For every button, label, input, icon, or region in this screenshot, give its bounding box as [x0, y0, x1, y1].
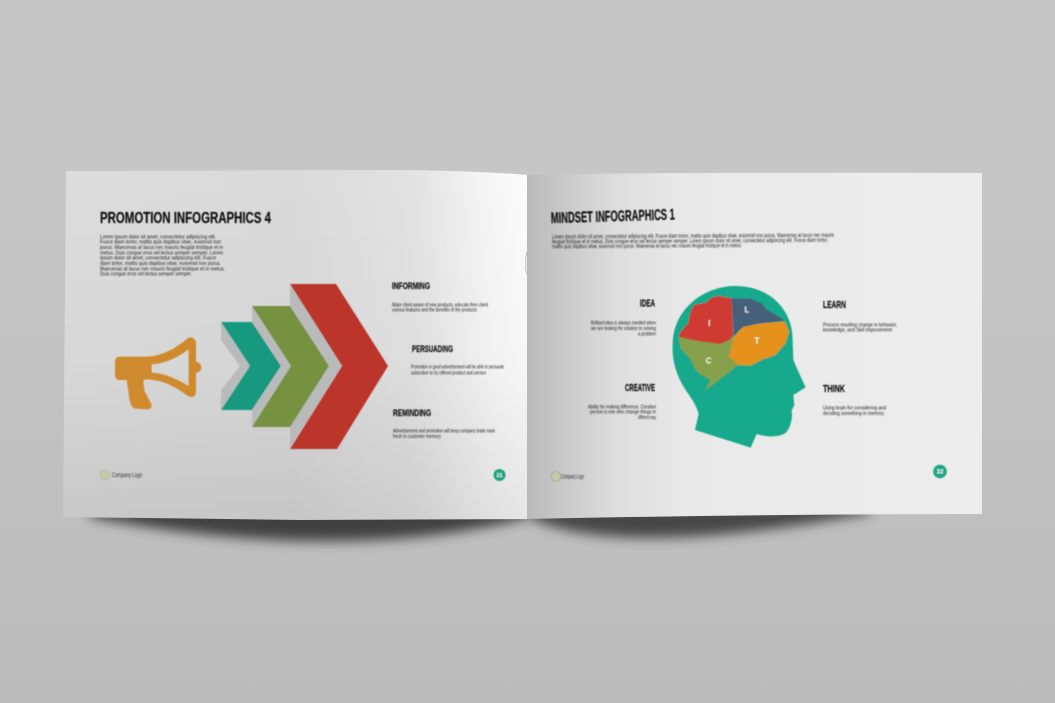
block: persuading — [411, 344, 504, 376]
page number 32 — [933, 465, 947, 478]
block: persuading: Promotion or good advertisement will be able to persuade — [411, 364, 504, 370]
company logo right — [551, 472, 584, 481]
block: think: Using brain for considering and — [823, 406, 886, 412]
intro paragraph: Lorem ipsum dolor sit amet, consectetur adipiscing elit. Fusce diam tortor, mattis quis dapibus vitae, euismod non purus. Maecenas at lacus nec mauris — [552, 233, 834, 240]
company logo right: Company Logo — [561, 474, 584, 480]
block: learn — [823, 300, 897, 334]
page number 32: 32 — [937, 470, 944, 476]
chevron: red — [290, 284, 388, 449]
block: creative: person is one who change things in — [590, 410, 656, 416]
block: learn: LEARN — [823, 300, 846, 311]
lobe: green C — [678, 337, 738, 391]
block: creative: different way — [638, 415, 656, 421]
block: creative: CREATIVE — [625, 383, 655, 394]
block: persuading: subscriber to try offered product and service — [411, 370, 486, 376]
block: reminding: Advertisement and promotion will keep company trade mark — [393, 428, 495, 434]
heading: promotion infographics 4: PROMOTION INFOGRAPHICS 4 — [100, 210, 271, 227]
block: informing: various features and the benefits of the products — [392, 308, 477, 314]
intro paragraph: purus. Maecenas at lacus nec mauris feugiat tristique et in — [100, 245, 223, 251]
block: idea — [590, 298, 656, 338]
intro paragraph: Maecenas at lacus nec mauris feugiat tristique et in metus. — [100, 266, 225, 272]
block: reminding — [393, 408, 495, 440]
intro paragraph — [552, 233, 834, 250]
company logo left — [100, 470, 142, 480]
intro paragraph — [100, 234, 225, 278]
page number 21: 21 — [496, 473, 503, 479]
lobe: orange T — [729, 322, 789, 365]
block: reminding: REMINDING — [393, 408, 431, 419]
lobe: orange T: T — [755, 337, 760, 346]
page shadows — [90, 505, 870, 541]
intro paragraph: ipsum dolor sit amet, consectetur adipiscing elit. Fusce — [100, 256, 216, 262]
block: think: THINK — [823, 384, 846, 395]
icon: megaphone — [115, 337, 201, 409]
block: informing: INFORMING — [392, 281, 430, 292]
block: creative — [588, 383, 656, 421]
chevron: teal — [221, 322, 281, 410]
block: creative: Ability for making difference. Creative — [588, 404, 656, 410]
block: idea: a problem — [638, 332, 656, 338]
head silhouette — [673, 286, 806, 448]
intro paragraph: metus. Duis congue eros vel lectus semper semper. Lorem — [100, 250, 223, 256]
intro paragraph: feugiat tristique et in metus. Duis congue eros vel lectus semper semper. Lorem ipsum dolor sit amet, consectetur adipiscing elit. Fusce diam tortor, — [552, 238, 828, 245]
lobe: red I: I — [708, 319, 710, 328]
block: learn: knowledge, and Skill improvement — [823, 328, 892, 334]
block: idea: IDEA — [640, 298, 655, 310]
icon: head with brain lobes — [673, 286, 806, 448]
intro paragraph: Fusce diam tortor, mattis quis dapibus vitae, euismod non — [100, 240, 221, 246]
heading: mindset infographics 1: MINDSET INFOGRAPHICS 1 — [551, 207, 675, 227]
block: persuading: PERSUADING — [412, 344, 453, 355]
block: idea: Brilliant idea is always needed when — [591, 320, 656, 326]
block: reminding: fresh in customer memory — [393, 434, 441, 440]
block: informing: Make client aware of new products, educate then client — [392, 302, 488, 308]
spine binding marks — [526, 252, 527, 274]
left page — [63, 170, 528, 520]
block: think — [823, 384, 886, 417]
page number 21 — [494, 469, 506, 481]
intro paragraph: Lorem ipsum dolor sit amet, consectetur adipiscing elit. — [100, 234, 216, 240]
intro paragraph: diam tortor, mattis quis dapibus vitae, euismod non purus. — [100, 261, 221, 267]
chevron: green — [252, 306, 329, 427]
block: informing — [392, 281, 488, 314]
lobe: blue L — [732, 298, 785, 337]
intro paragraph: Duis congue eros vel lectus semper semper. — [100, 272, 192, 278]
block: idea: we are looking for solution to solving — [590, 326, 656, 332]
block: learn: Process resulting change in behavior, — [823, 322, 897, 328]
block: think: deciding something in memory — [823, 411, 884, 417]
intro paragraph: mattis quis dapibus vitae, euismod non purus. Maecenas at lacus nec mauris feugiat tristique et in metus. — [552, 243, 742, 250]
right page — [527, 173, 982, 519]
lobe: blue L: L — [745, 306, 750, 315]
lobe: green C: C — [706, 356, 712, 365]
company logo left: Company Logo — [112, 473, 142, 479]
lobe: red I — [679, 297, 733, 343]
